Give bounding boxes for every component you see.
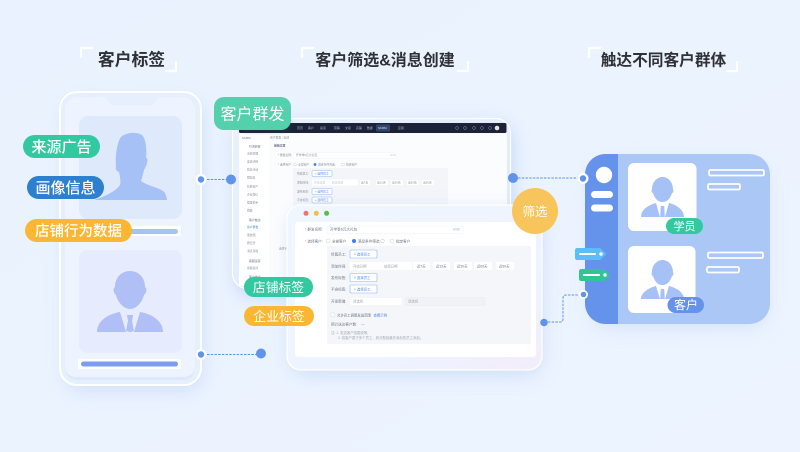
title: reach customer groups: 触达不同客户群体 (601, 50, 727, 70)
form fields: 近7天 (417, 263, 426, 268)
card: customer profile two (79, 250, 182, 353)
card: student: 学员 (674, 219, 696, 233)
breadcrumb: 客户群发 / 新建 (270, 136, 289, 140)
heading: basic settings: 基础设置 (274, 142, 286, 148)
form: back screen fields: 近30天 (392, 180, 401, 184)
connector: front panel to customer groups (540, 295, 578, 326)
form: back screen fields: 近7天 (361, 180, 368, 184)
navigation bar: 交易 (345, 125, 351, 130)
form fields: 近90天 (499, 263, 510, 268)
navigation bar: 营销 (334, 125, 340, 130)
form fields: * 选择客户: (305, 238, 323, 244)
card: customer: 客户 (674, 297, 698, 312)
tag: enterprise label: 企业标签 (253, 309, 305, 324)
navigation bar: 数据 (367, 125, 373, 130)
form fields: 开始日期 (353, 263, 367, 268)
form fields: 允许员工调整发送范围 (337, 312, 372, 318)
badge: filter (512, 188, 558, 234)
form fields: 注: 1. 发送客户范围说明; (331, 330, 368, 335)
form fields: 近60天 (477, 263, 488, 268)
connector node: upper (578, 173, 588, 184)
tag: store label: 店铺标签 (253, 280, 304, 295)
card: student (628, 163, 703, 234)
navigation bar (239, 123, 506, 133)
sidebar menu: 渠道活码 (247, 160, 258, 164)
badge: filter: 筛选 (522, 204, 548, 219)
form: back screen fields: 开始日期 (314, 180, 325, 184)
navigation bar: 客户 (308, 125, 314, 130)
form fields: 开发新增: (331, 298, 346, 304)
icon: blue tag (575, 248, 606, 260)
form fields: 不含标签: (331, 286, 346, 292)
card: customer profile one (79, 116, 182, 219)
form fields: 2. 若客户属于多个员工，其分配给最先添加的员工添加。 (338, 335, 423, 340)
sidebar menu: 客服运营 (249, 258, 261, 263)
tag: source ads: 来源广告 (31, 139, 92, 156)
sidebar menu: 客户触达 (249, 217, 261, 222)
sidebar menu: 客服接待 (247, 266, 258, 270)
form: back screen fields: + 选择员工 (315, 198, 329, 202)
sidebar menu: 群裂变 (247, 176, 256, 180)
sidebar menu: 朋友圈 (247, 233, 256, 237)
form fields: — (361, 322, 365, 326)
sidebar menu: 客户统计 (249, 274, 261, 279)
form: back screen fields: 全部客户 (298, 162, 309, 166)
navigation bar: 应用 (398, 125, 404, 130)
form fields: + 选择员工 (354, 286, 371, 292)
tag: store label (244, 277, 313, 297)
form: back screen fields: 近15天 (377, 180, 386, 184)
sidebar menu: SCRM (242, 136, 251, 140)
sidebar menu: 群日历 (247, 241, 256, 245)
form fields: 请选择 (408, 298, 419, 304)
form: back screen fields: * 群发名称: (278, 153, 292, 157)
form fields: 查看示例 (374, 312, 388, 318)
form: back screen fields: 添加时间: (297, 180, 309, 184)
sidebar menu (239, 133, 269, 286)
tag: enterprise label (244, 306, 314, 326)
form: back screen fields: 不含标签: (297, 198, 309, 202)
window buttons (304, 211, 329, 216)
form: back screen fields: 选择客户 (279, 246, 290, 250)
form: back screen fields (278, 152, 448, 250)
form: back screen fields: 发布标签: (297, 190, 309, 194)
connector node: lower (579, 290, 588, 299)
tag: portrait info (27, 176, 104, 199)
form fields: 0/30 (453, 228, 460, 232)
form: back screen fields: * 选择客户: (278, 162, 292, 166)
form fields: * 群发名称: (305, 226, 323, 232)
form fields: 添加时间: (331, 264, 346, 268)
title: customer tags: 客户标签 (98, 50, 165, 70)
tag: store behaviour data: 店铺行为数据 (35, 223, 122, 240)
title: reach customer groups (589, 48, 737, 71)
form fields: 所属员工: (331, 252, 346, 256)
sidebar menu: 客户群发 (247, 225, 258, 229)
form: back screen fields: 满足条件筛选 (318, 162, 335, 166)
connector: phone to front panel (196, 348, 266, 360)
tag: source ads (23, 135, 100, 158)
form: back screen fields: 0/30 (390, 153, 396, 157)
icon: green tag (579, 269, 610, 281)
title: filter and message creation: 客户筛选&消息创建 (315, 50, 455, 70)
navigation bar: 店铺 (356, 125, 362, 130)
form: back screen fields: 指定客户 (346, 162, 357, 166)
title: filter and message creation (302, 48, 468, 71)
form: back screen fields: 所属员工: (297, 172, 309, 176)
sidebar menu: 群聊 (247, 208, 253, 212)
form fields: 近30天 (457, 263, 468, 268)
bar: profile two (78, 359, 181, 369)
form: back screen fields: 近60天 (408, 180, 417, 184)
label: group message badge: 客户群发 (220, 106, 285, 124)
sidebar menu: 群发助手 (247, 200, 258, 204)
sidebar menu: 裂变活动 (247, 168, 258, 172)
form fields: 全部客户 (332, 238, 347, 244)
sidebar menu: 企业微信 (247, 192, 258, 196)
form fields: 请选择 (353, 298, 364, 304)
form fields (305, 226, 531, 344)
panel: back tablet screenshot (232, 118, 512, 296)
navigation bar: 首页 (297, 125, 303, 130)
connector: tablet to customer groups (508, 173, 578, 183)
panel: front message form (287, 205, 542, 375)
title: customer tags (81, 48, 176, 71)
sidebar icons (591, 167, 613, 212)
text lines: student details (708, 170, 764, 190)
connector: phone to back tablet (196, 174, 236, 185)
panel: customer groups (575, 154, 770, 328)
label: group message badge (214, 97, 291, 131)
form fields: 满足条件筛选 (358, 238, 380, 244)
sidebar menu: 引流获客 (249, 144, 261, 148)
form: back screen fields: 开学季6元大礼包 (296, 153, 317, 157)
form fields: 近15天 (436, 263, 447, 268)
form fields: + 选择员工 (354, 275, 371, 280)
text lines: customer details (707, 252, 763, 272)
form fields: + 选择员工 (354, 251, 371, 256)
form fields: 开学季6元大礼包 (330, 226, 358, 232)
panel: phone with customer tags (60, 92, 204, 392)
tag: store behaviour data (25, 219, 132, 242)
form: back screen fields: + 选择员工 (315, 172, 329, 176)
navigation bar: SCRM (378, 126, 387, 130)
form fields: 预计送达客户数: (331, 322, 357, 326)
navigation bar: 渠道 (320, 125, 326, 130)
form: back screen fields: + 选择员工 (315, 190, 329, 194)
form fields: 指定客户 (396, 238, 411, 244)
card: customer (628, 246, 704, 313)
form: back screen fields: 近90天 (423, 180, 432, 184)
sidebar menu: 活码管理 (247, 152, 258, 156)
sidebar menu: 消息存档 (247, 249, 258, 253)
form fields: 发布标签: (331, 275, 346, 280)
tag: portrait info: 画像信息 (35, 179, 96, 197)
sidebar menu: 智能客户 (247, 184, 258, 188)
bar: profile one (78, 226, 181, 236)
form: back screen fields: 结束日期 (332, 180, 343, 184)
form fields: 结束日期 (384, 263, 398, 268)
